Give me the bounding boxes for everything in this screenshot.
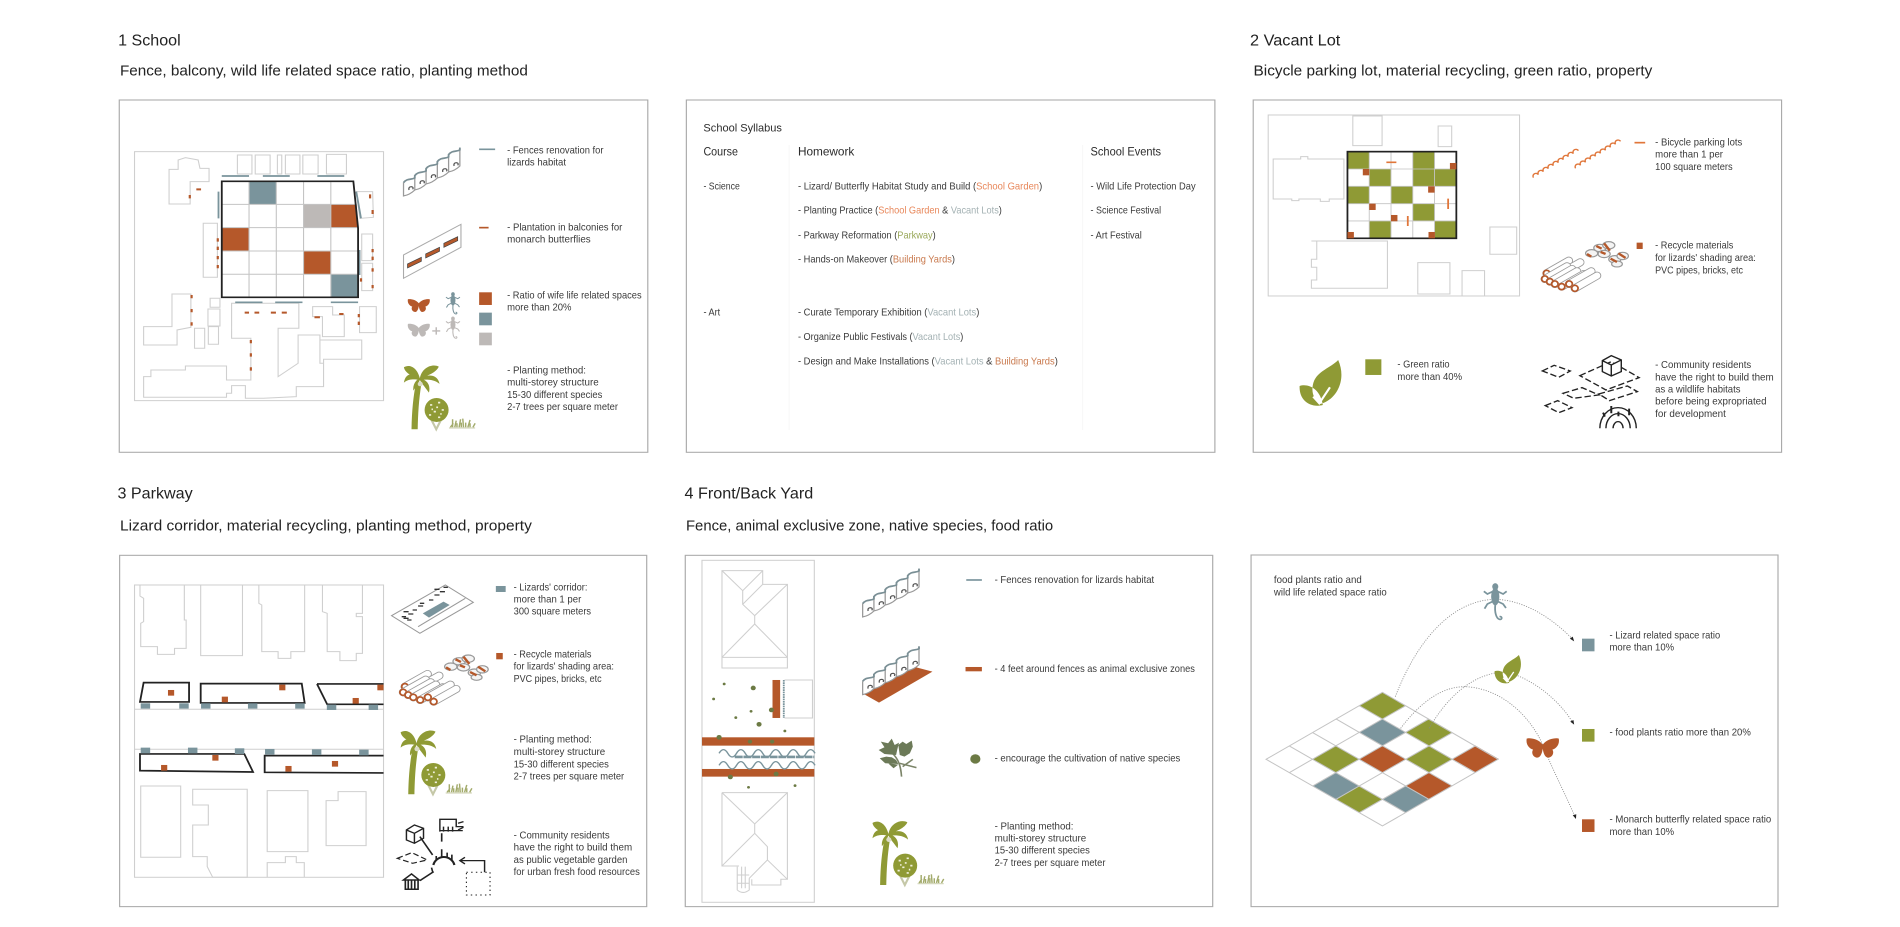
text: balconies xyxy=(507,223,623,245)
text: fences: - Fences renovation for xyxy=(507,146,604,157)
text: butterfly ratio xyxy=(1609,815,1772,838)
subheading: yard criteria: Fence, animal exclusive zone, native species, food ratio xyxy=(686,518,1053,534)
text: fences: lizards habitat xyxy=(507,158,566,169)
panel frame: parkway xyxy=(120,555,647,907)
art homework list xyxy=(798,308,1058,367)
icon: lizard xyxy=(1484,583,1507,619)
icon: lizard teal xyxy=(446,292,460,314)
school site plan xyxy=(135,152,384,401)
text: lizard ratio: - Lizard related space ratio xyxy=(1609,631,1721,642)
text: bicycle parking: more than 1 per xyxy=(1655,150,1724,161)
text: lizards corridor: more than 1 per xyxy=(514,595,582,606)
icon: recycled pipes and bricks xyxy=(1542,242,1628,291)
text: butterfly ratio: more than 10% xyxy=(1609,827,1674,838)
text: community residents: - Community residents xyxy=(1655,360,1751,371)
text: community residents: - Community residents xyxy=(514,831,610,841)
panel: vacant lot xyxy=(1250,33,1782,452)
subheading: parkway criteria: Lizard corridor, material recycling, planting method, property xyxy=(120,518,532,534)
text: bicycle parking: 100 square meters xyxy=(1655,162,1733,173)
icon: fence xyxy=(404,148,460,196)
text: planting method: multi-storey structure xyxy=(507,378,599,388)
text: planting method: - Planting method: xyxy=(507,366,586,376)
text: recycle materials: for lizards' shading area: xyxy=(1655,253,1756,264)
vacant lot site plan xyxy=(1268,115,1520,296)
panel frame: school xyxy=(119,100,648,452)
yard site plan xyxy=(702,560,815,902)
column header: school events: School Events xyxy=(1091,145,1161,159)
text: community residents: have the right to build them xyxy=(1655,373,1774,383)
text: community residents: have the right to build them xyxy=(514,843,632,853)
text: lizard ratio xyxy=(1609,631,1721,654)
grid: school cells xyxy=(222,181,358,297)
legend: recycle swatch xyxy=(1637,243,1643,249)
text: community residents xyxy=(1655,360,1774,420)
text: recycle materials: PVC pipes, bricks, etc xyxy=(514,674,602,685)
text: recycle materials: - Recycle materials xyxy=(1655,241,1733,252)
icon: palm and shrub xyxy=(872,821,944,885)
text: balconies: - Plantation in balconies for xyxy=(507,223,623,233)
text: community residents: before being expropriated xyxy=(1655,397,1767,408)
arrow: butterfly path xyxy=(1401,687,1576,819)
text: planting method xyxy=(995,822,1106,869)
text: lizard ratio: more than 10% xyxy=(1609,643,1674,654)
course: art: - Art xyxy=(703,308,720,319)
arrow: lizard path xyxy=(1395,599,1574,697)
text: recycle materials xyxy=(1655,241,1756,276)
legend: native species dot xyxy=(970,754,980,764)
text: planting method: 15-30 different species xyxy=(514,760,609,770)
icon: community garden diagram xyxy=(397,819,490,895)
icon: lizard grey xyxy=(446,317,460,338)
icon: bicycle racks xyxy=(1533,140,1621,178)
text: green ratio: more than 40% xyxy=(1397,372,1462,383)
legend: ratio swatches xyxy=(479,292,492,345)
panel frame: ratio xyxy=(1251,555,1778,907)
panel frame: yard xyxy=(685,555,1213,907)
icon: butterfly grey xyxy=(408,324,430,337)
text: panel title: food plants ratio and xyxy=(1274,575,1362,586)
text: planting method: multi-storey structure xyxy=(995,834,1087,844)
school events list: - Science Festival xyxy=(1091,206,1161,217)
art homework list: - Design and Make Installations (Vacant Lots & Building Yards) xyxy=(798,357,1058,367)
heading: 4 Front/Back Yard: 4 Front/Back Yard xyxy=(685,485,813,502)
text: ratio: more than 20% xyxy=(507,303,571,314)
legend: food plants swatch xyxy=(1582,729,1595,742)
school events list: - Wild Life Protection Day xyxy=(1091,182,1196,192)
text: planting method: 2-7 trees per square meter xyxy=(514,772,625,783)
art homework list: - Curate Temporary Exhibition (Vacant Lots) xyxy=(798,308,979,319)
text: native species: - encourage the cultivation of native species xyxy=(995,754,1180,765)
text: planting method: - Planting method: xyxy=(995,822,1073,832)
text: exclusive zones: - 4 feet around fences as animal exclusive zones xyxy=(995,664,1195,675)
icon: butterfly xyxy=(1526,738,1559,758)
science homework list: - Parkway Reformation (Parkway) xyxy=(798,231,936,241)
text: community residents: for development xyxy=(1655,409,1726,420)
text: panel title: wild life related space ratio xyxy=(1273,588,1387,598)
legend: balcony dash xyxy=(479,225,489,230)
text: planting method: 2-7 trees per square meter xyxy=(507,402,619,413)
text: food plants ratio: - food plants ratio more than 20% xyxy=(1609,728,1751,738)
science homework list: - Hands-on Makeover (Building Yards) xyxy=(798,255,955,266)
text: fences xyxy=(507,146,604,169)
science homework list xyxy=(798,182,1042,266)
panel: parkway xyxy=(117,485,647,907)
heading: 2 Vacant Lot: 2 Vacant Lot xyxy=(1250,33,1341,50)
legend: fence line xyxy=(479,147,495,152)
icon: palm and shrub xyxy=(401,731,472,794)
text: recycle materials xyxy=(514,650,614,685)
panel frame: syllabus xyxy=(686,100,1215,452)
text: bicycle parking xyxy=(1655,138,1742,173)
panel: school xyxy=(118,32,648,452)
art homework list: - Organize Public Festivals (Vacant Lots) xyxy=(798,332,963,343)
science homework list: - Planting Practice (School Garden & Vacant Lots) xyxy=(798,206,1002,217)
text: green ratio: - Green ratio xyxy=(1397,360,1450,371)
text: lizards corridor: - Lizards' corridor: xyxy=(514,583,587,593)
text: planting method xyxy=(507,366,619,413)
heading: 3 Parkway: 3 Parkway xyxy=(117,485,193,502)
text: planting method: - Planting method: xyxy=(514,735,592,746)
legend: bicycle dash xyxy=(1634,140,1645,145)
parkway site plan xyxy=(135,585,384,877)
icon: leaf xyxy=(1495,655,1521,683)
text: ratio: - Ratio of wife life related spaces xyxy=(507,291,642,301)
text: community residents: as public vegetable garden xyxy=(514,855,627,866)
text: planting method: 15-30 different species xyxy=(507,390,602,401)
icon: fence xyxy=(863,569,919,617)
legend: exclusive zone swatch xyxy=(966,667,982,671)
text: lizards corridor xyxy=(514,583,591,618)
text: community residents: for urban fresh food resources xyxy=(514,867,640,878)
legend: corridor swatch xyxy=(496,586,506,592)
text: bicycle parking: - Bicycle parking lots xyxy=(1655,138,1742,148)
legend: lizard swatch xyxy=(1582,639,1595,651)
subheading: school criteria: Fence, balcony, wild life related space ratio, planting method xyxy=(120,63,528,79)
legend: butterfly swatch xyxy=(1582,819,1595,832)
text: butterfly ratio: - Monarch butterfly related space ratio xyxy=(1609,815,1772,826)
icon: palm and shrub xyxy=(404,365,475,429)
subheading: vacant lot criteria: Bicycle parking lot, material recycling, green ratio, property xyxy=(1254,63,1653,80)
text: ratio xyxy=(507,291,642,314)
column header: homework: Homework xyxy=(798,145,855,159)
text: recycle materials: for lizards' shading area: xyxy=(514,662,614,673)
text: panel title xyxy=(1273,575,1387,598)
school events list xyxy=(1091,182,1196,241)
text: planting method: 2-7 trees per square meter xyxy=(995,858,1106,869)
grid: green cells xyxy=(1347,152,1456,238)
course: science: - Science xyxy=(703,182,740,192)
icon: recycled pipes and bricks xyxy=(400,655,488,705)
legend: fence line xyxy=(966,577,982,582)
isometric grid xyxy=(1266,692,1499,826)
panel: food plants and wildlife ratio xyxy=(1251,555,1778,907)
icon: plus xyxy=(432,327,440,335)
text: lizards corridor: 300 square meters xyxy=(514,607,591,618)
text: fences: - Fences renovation for lizards habitat xyxy=(995,575,1154,586)
icon: lizard corridor xyxy=(392,585,473,633)
icon: fence with exclusive zone xyxy=(863,646,932,703)
icon: balcony planters xyxy=(404,224,461,278)
icon: community property diagram xyxy=(1542,356,1639,428)
title: school syllabus: School Syllabus xyxy=(703,123,782,134)
icon: native plant xyxy=(879,739,916,777)
text: community residents: as a wildlife habitats xyxy=(1655,385,1741,396)
icon: leaf xyxy=(1300,360,1341,406)
arrow: food plant path xyxy=(1429,672,1574,728)
text: recycle materials: PVC pipes, bricks, etc xyxy=(1655,266,1743,276)
heading: 1 School: 1 School xyxy=(118,32,181,49)
text: balconies: monarch butterflies xyxy=(507,235,591,245)
panel: front/back yard xyxy=(685,485,1213,907)
science homework list: - Lizard/ Butterfly Habitat Study and Build (School Garden) xyxy=(798,182,1042,192)
legend: green swatch xyxy=(1365,359,1381,375)
text: green ratio xyxy=(1397,360,1462,383)
school events list: - Art Festival xyxy=(1091,231,1142,241)
icon: butterfly orange xyxy=(408,299,430,312)
text: planting method: 15-30 different species xyxy=(995,846,1090,856)
column header: course: Course xyxy=(703,145,738,159)
text: planting method xyxy=(514,735,625,783)
text: planting method: multi-storey structure xyxy=(514,747,606,758)
panel frame: vacant lot xyxy=(1253,100,1782,452)
legend: recycle swatch xyxy=(496,653,503,659)
panel: school syllabus xyxy=(686,100,1215,452)
text: recycle materials: - Recycle materials xyxy=(514,650,591,661)
text: community residents xyxy=(514,831,640,878)
